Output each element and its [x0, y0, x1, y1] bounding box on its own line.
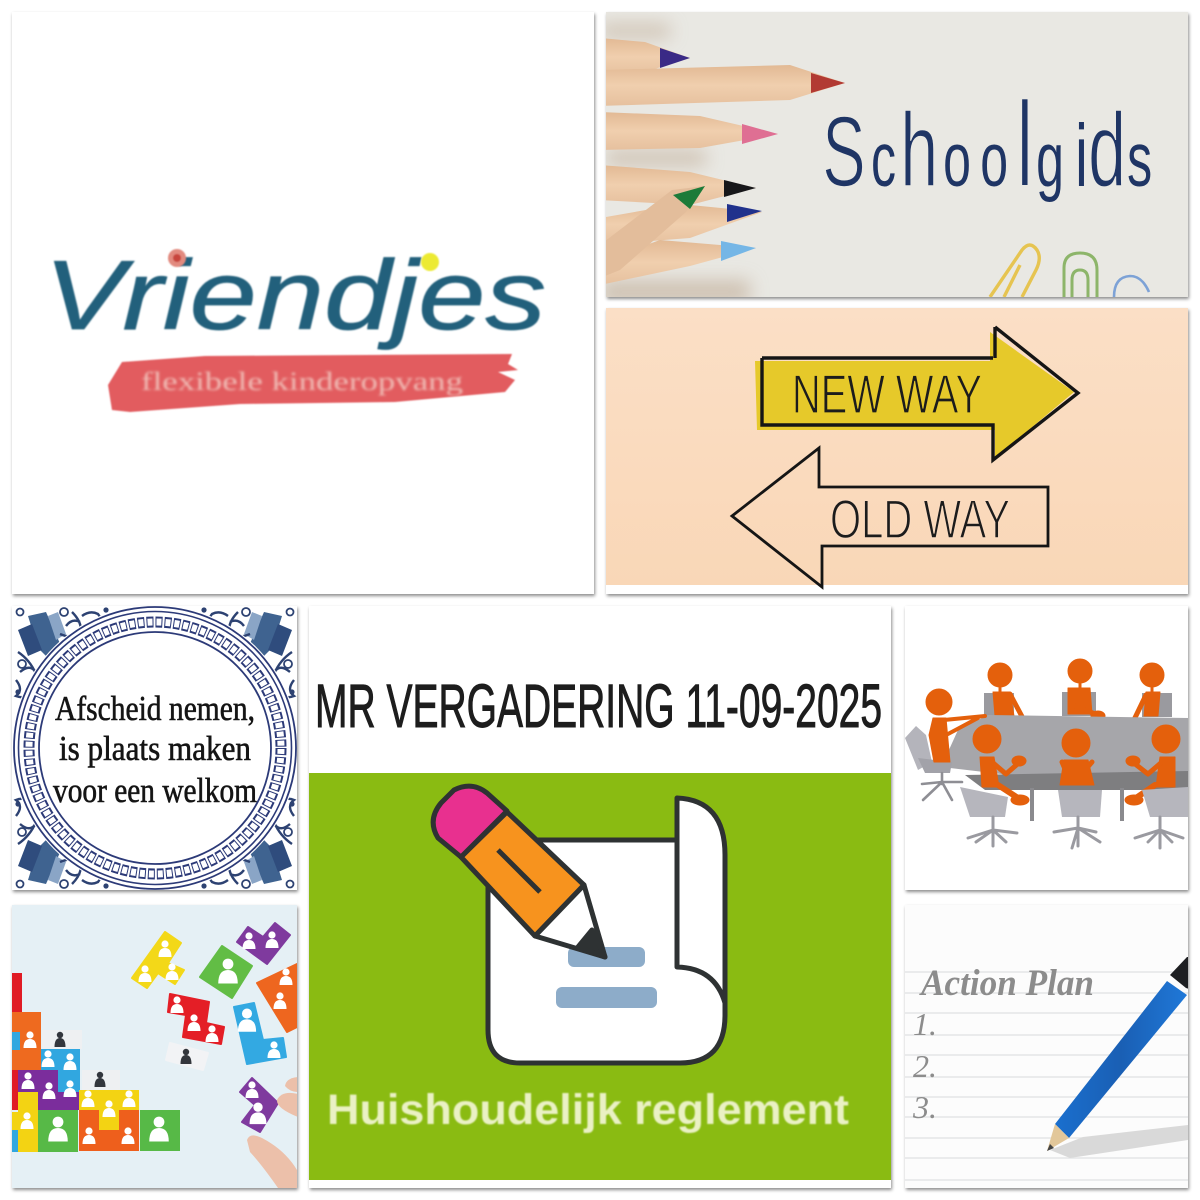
icon: pencil [433, 786, 605, 957]
icon: red pencil [600, 65, 845, 106]
arrow: old way [732, 448, 1048, 587]
quote text: Afscheid nemen, [55, 689, 255, 728]
list numbers: 3. [912, 1089, 937, 1125]
icon: blue pencil [606, 204, 762, 241]
red brush band [108, 354, 518, 412]
icon: black pencil [600, 165, 756, 205]
panel: Vriendjes logo [12, 12, 594, 594]
left figure [926, 689, 985, 762]
panel: huishoudelijk reglement title card [309, 606, 891, 1188]
front chair left [960, 787, 1017, 846]
icon: light blue pencil [600, 240, 756, 285]
front chair right [1135, 787, 1188, 848]
Vriendjes wordmark: Vriendjes [44, 240, 546, 350]
list numbers: 2. [913, 1048, 937, 1084]
icon: yellow paper clip [990, 245, 1039, 297]
old way label: OLD WAY [830, 488, 1010, 550]
icon: pink pencil [600, 112, 778, 150]
quote text [52, 695, 257, 803]
table [948, 715, 1188, 776]
back figures [988, 658, 1164, 718]
quote text: is plaats maken [59, 729, 251, 768]
icon: document scroll [488, 798, 725, 1063]
heading: Schoolgids: d [1088, 91, 1126, 209]
quote text: voor een welkom [53, 771, 257, 810]
corner ornaments [15, 607, 295, 889]
heading: Schoolgids: o [943, 116, 971, 203]
loose blocks [132, 923, 297, 1132]
heading: Schoolgids: i [1075, 107, 1088, 205]
icon: blue paper clip [1114, 276, 1149, 297]
pencil shadows [600, 24, 750, 304]
icon: hand [247, 1077, 298, 1188]
back chairs [984, 692, 1172, 717]
panel: meeting [905, 606, 1188, 890]
new way label: NEW WAY [792, 363, 982, 425]
heading: action plan: Action Plan [919, 963, 1094, 1004]
icon: yellow flower [421, 253, 439, 271]
stacked blocks [12, 973, 180, 1152]
front chair middle [1054, 790, 1102, 848]
panel: Delft tile quote [12, 605, 298, 891]
arrow: new way [755, 327, 1078, 460]
panel: new way old way [606, 308, 1188, 594]
document lines [556, 947, 657, 1008]
icon: pen [1047, 957, 1192, 1151]
heading: Schoolgids: c [871, 116, 896, 203]
heading: Schoolgids: h [900, 91, 938, 209]
heading: Schoolgids: o [980, 116, 1008, 203]
front figures [973, 725, 1180, 805]
panel: tetris team blocks [12, 905, 298, 1188]
icon: purple pencil [606, 38, 690, 70]
heading: Schoolgids: g [1036, 116, 1064, 203]
left chair [905, 726, 962, 800]
panel: Schoolgids [600, 12, 1188, 304]
panel: action plan [905, 905, 1192, 1188]
heading: Schoolgids: s [1127, 116, 1152, 203]
heading: Schoolgids: S [822, 96, 866, 207]
ring border [12, 605, 298, 891]
ruled lines [905, 972, 1188, 1180]
tagline: flexibele kinderopvang [141, 367, 463, 396]
icon: red flower [168, 249, 186, 267]
green background [309, 773, 891, 1180]
list numbers [913, 1014, 934, 1118]
heading: Schoolgids: l [1016, 76, 1034, 212]
title: MR VERGADERING 11-09-2025 [315, 672, 882, 740]
pen shadow [1050, 1125, 1188, 1158]
caption: Huishoudelijk reglement [327, 1086, 849, 1134]
list numbers: 1. [913, 1006, 937, 1042]
icon: green pencil [600, 186, 705, 278]
icon: green paper clip [1064, 253, 1097, 297]
